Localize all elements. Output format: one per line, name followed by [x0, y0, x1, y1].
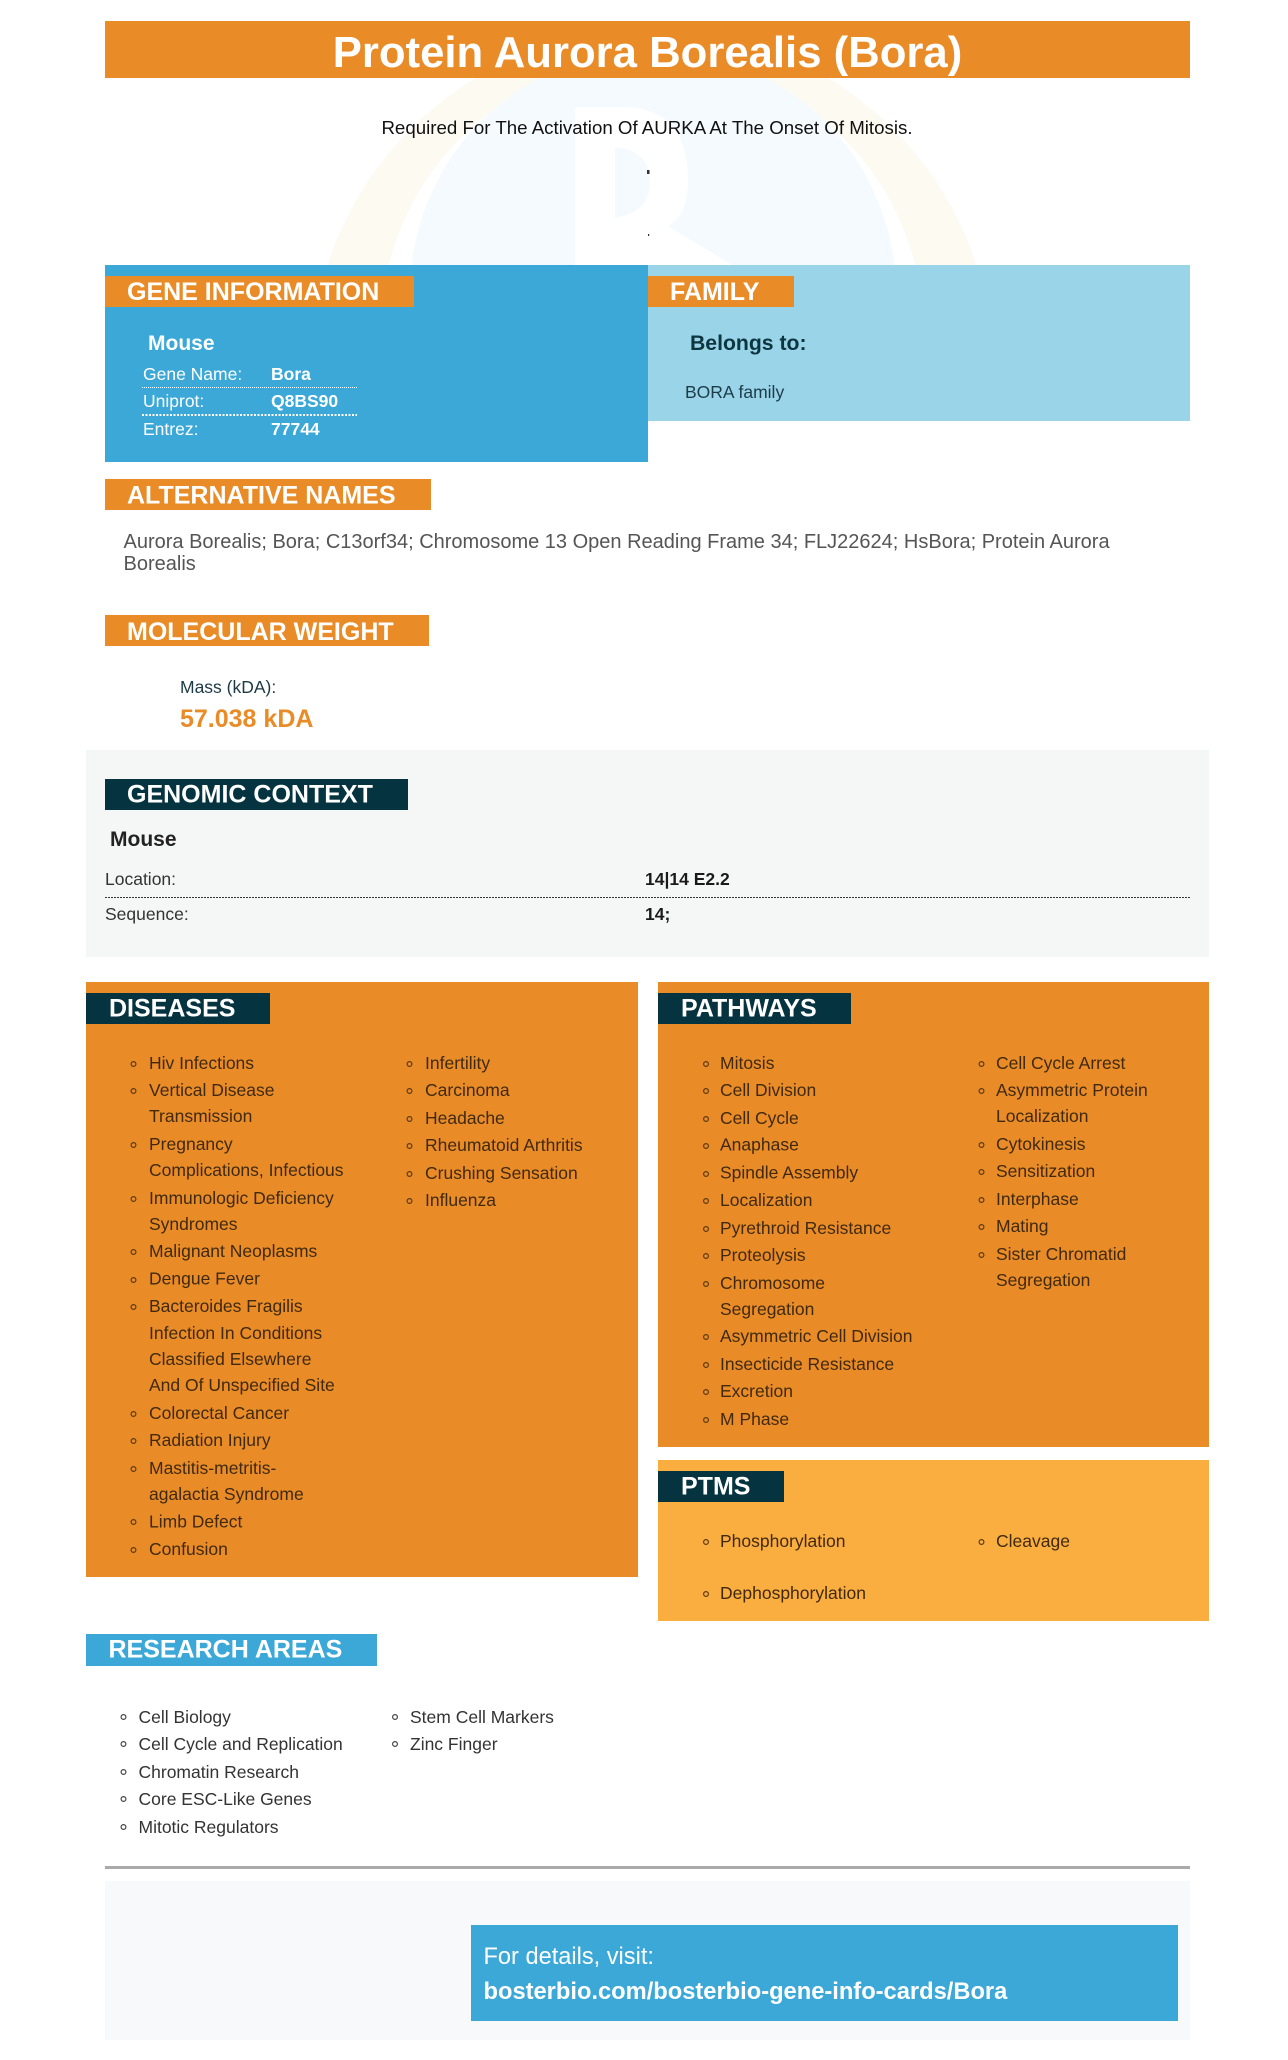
panel: ptms — [658, 1460, 1209, 1621]
list: pathways column 2: Segregation — [996, 1270, 1090, 1290]
list: diseases column 1: Limb Defect — [149, 1512, 243, 1532]
list: research areas column 1 — [121, 1707, 343, 1837]
panel: genomic context — [86, 750, 1209, 957]
list: ptms: Cleavage — [996, 1531, 1070, 1551]
list: diseases column 2: Influenza — [425, 1190, 496, 1210]
family value: BORA family — [685, 382, 784, 402]
list: diseases column 2: Crushing Sensation — [425, 1163, 578, 1183]
gene info table: Bora — [271, 364, 311, 384]
list: pathways column 1: Insecticide Resistance — [720, 1354, 894, 1374]
list: pathways column 1: Pyrethroid Resistance — [720, 1218, 891, 1238]
list: diseases column 2 — [407, 1053, 583, 1210]
list: diseases column 1: Colorectal Cancer — [149, 1403, 289, 1423]
molecular weight value: Mass (kDA): — [180, 677, 276, 697]
list: pathways column 2: Mating — [996, 1216, 1049, 1236]
panel: family — [648, 265, 1190, 421]
list: diseases column 1: Pregnancy — [149, 1134, 233, 1154]
list: diseases column 2: Rheumatoid Arthritis — [425, 1135, 583, 1155]
gene info table — [142, 364, 357, 439]
list: pathways column 2 — [979, 1053, 1148, 1290]
list: diseases column 1: Mastitis-metritis- — [149, 1458, 277, 1478]
list: pathways column 1: Segregation — [720, 1299, 814, 1319]
list: pathways column 1: Localization — [720, 1190, 812, 1210]
list: pathways column 1 — [704, 1053, 913, 1429]
list: research areas column 2: Zinc Finger — [410, 1734, 498, 1754]
list: diseases column 1: Radiation Injury — [149, 1430, 271, 1450]
heading: research areas: RESEARCH AREAS — [108, 1636, 342, 1664]
heading: ptms — [658, 1471, 784, 1502]
molecular weight value — [180, 677, 313, 733]
genomic table: Location: — [105, 869, 176, 889]
list: pathways column 1: Cell Cycle — [720, 1108, 799, 1128]
heading: molecular weight: MOLECULAR WEIGHT — [127, 618, 394, 646]
list: diseases column 2: Headache — [425, 1108, 505, 1128]
genomic table: 14|14 E2.2 — [645, 869, 730, 889]
heading: pathways: PATHWAYS — [681, 994, 817, 1022]
list: diseases column 1: Malignant Neoplasms — [149, 1241, 318, 1261]
genomic table: Sequence: — [105, 904, 189, 924]
genomic table — [105, 869, 1190, 924]
heading: gene information: GENE INFORMATION — [127, 278, 379, 306]
list: research areas column 2 — [393, 1707, 554, 1754]
list: ptms: Dephosphorylation — [720, 1583, 866, 1603]
list: pathways column 1: Anaphase — [720, 1134, 799, 1154]
title banner: Protein Aurora Borealis (Bora) — [333, 28, 962, 77]
molecular weight value: 57.038 kDA — [180, 705, 313, 733]
list: pathways column 2: Cytokinesis — [996, 1134, 1086, 1154]
list: research areas column 1: Mitotic Regulators — [138, 1817, 279, 1837]
belongs to label: Belongs to: — [690, 332, 807, 355]
text: alternative names: Borealis — [124, 553, 196, 575]
heading: pathways — [658, 993, 851, 1024]
separator dots — [647, 170, 650, 236]
heading: ptms: PTMS — [681, 1472, 750, 1500]
heading: genomic context: GENOMIC CONTEXT — [127, 780, 373, 808]
list: pathways column 2: Asymmetric Protein — [996, 1080, 1148, 1100]
list: pathways column 1: Chromosome — [720, 1273, 825, 1293]
panel: gene information — [105, 265, 648, 462]
list: diseases column 1: Complications, Infectious — [149, 1160, 344, 1180]
species label: Mouse — [110, 828, 177, 851]
list: diseases column 1: Bacteroides Fragilis — [149, 1296, 303, 1316]
list: diseases column 1: Syndromes — [149, 1214, 238, 1234]
list: research areas column 1: Cell Biology — [138, 1707, 231, 1727]
list: diseases column 1: Infection In Conditions — [149, 1323, 322, 1343]
gene info table: Q8BS90 — [271, 391, 338, 411]
gene info table: Entrez: — [143, 419, 198, 439]
gene info table: 77744 — [271, 419, 320, 439]
panel: pathways — [658, 982, 1209, 1447]
list: diseases column 1: Transmission — [149, 1106, 252, 1126]
panel: footer — [105, 1881, 1190, 2040]
list: diseases column 2: Carcinoma — [425, 1080, 510, 1100]
list: pathways column 2: Localization — [996, 1106, 1088, 1126]
list: pathways column 2: Cell Cycle Arrest — [996, 1053, 1125, 1073]
gene info table: Uniprot: — [143, 391, 204, 411]
list: diseases column 2: Infertility — [425, 1053, 490, 1073]
list: research areas column 1: Chromatin Research — [138, 1762, 299, 1782]
list: diseases column 1: And Of Unspecified Site — [149, 1375, 335, 1395]
heading: family: FAMILY — [670, 278, 760, 306]
heading: diseases: DISEASES — [109, 994, 235, 1022]
list: ptms: Phosphorylation — [720, 1531, 846, 1551]
heading: diseases — [86, 993, 270, 1024]
list: pathways column 1: Cell Division — [720, 1080, 816, 1100]
heading: alternative names: ALTERNATIVE NAMES — [127, 482, 396, 510]
list: diseases column 1 — [131, 1053, 344, 1559]
list: diseases column 1: Confusion — [149, 1539, 228, 1559]
heading: family — [648, 276, 794, 307]
list: pathways column 2: Sister Chromatid — [996, 1244, 1126, 1264]
watermark logo — [328, 78, 976, 265]
list: ptms — [704, 1531, 1070, 1603]
species label: Mouse — [148, 332, 215, 355]
panel: diseases — [86, 982, 638, 1577]
list: pathways column 1: M Phase — [720, 1409, 789, 1429]
genomic table: 14; — [645, 904, 670, 924]
title banner — [105, 21, 1190, 78]
callout: details link: bosterbio.com/bosterbio-gene-info-cards/Bora — [484, 1979, 1008, 2005]
list: diseases column 1: agalactia Syndrome — [149, 1484, 304, 1504]
list: diseases column 1: Immunologic Deficiency — [149, 1188, 334, 1208]
callout: details link — [471, 1925, 1178, 2021]
text: alternative names: Aurora Borealis; Bora; C13orf34; Chromosome 13 Open Reading Frame 34; FLJ22624; HsBora; Protein Aurora — [124, 531, 1110, 553]
text: alternative names — [124, 531, 1110, 575]
list: diseases column 1: Vertical Disease — [149, 1080, 274, 1100]
callout: details link: For details, visit: — [484, 1944, 654, 1970]
list: pathways column 2: Sensitization — [996, 1161, 1095, 1181]
gene info table: Gene Name: — [143, 364, 242, 384]
list: pathways column 1: Spindle Assembly — [720, 1162, 858, 1182]
list: research areas column 2: Stem Cell Markers — [410, 1707, 554, 1727]
subtitle: Required For The Activation Of AURKA At The Onset Of Mitosis. — [381, 117, 913, 138]
list: research areas column 1: Core ESC-Like Genes — [138, 1789, 312, 1809]
list: diseases column 1: Dengue Fever — [149, 1268, 260, 1288]
list: pathways column 1: Mitosis — [720, 1053, 775, 1073]
list: diseases column 1: Classified Elsewhere — [149, 1349, 311, 1369]
list: pathways column 1: Asymmetric Cell Division — [720, 1326, 913, 1346]
list: diseases column 1: Hiv Infections — [149, 1053, 254, 1073]
list: pathways column 2: Interphase — [996, 1189, 1079, 1209]
list: pathways column 1: Proteolysis — [720, 1245, 806, 1265]
list: research areas column 1: Cell Cycle and Replication — [138, 1734, 343, 1754]
list: pathways column 1: Excretion — [720, 1381, 793, 1401]
